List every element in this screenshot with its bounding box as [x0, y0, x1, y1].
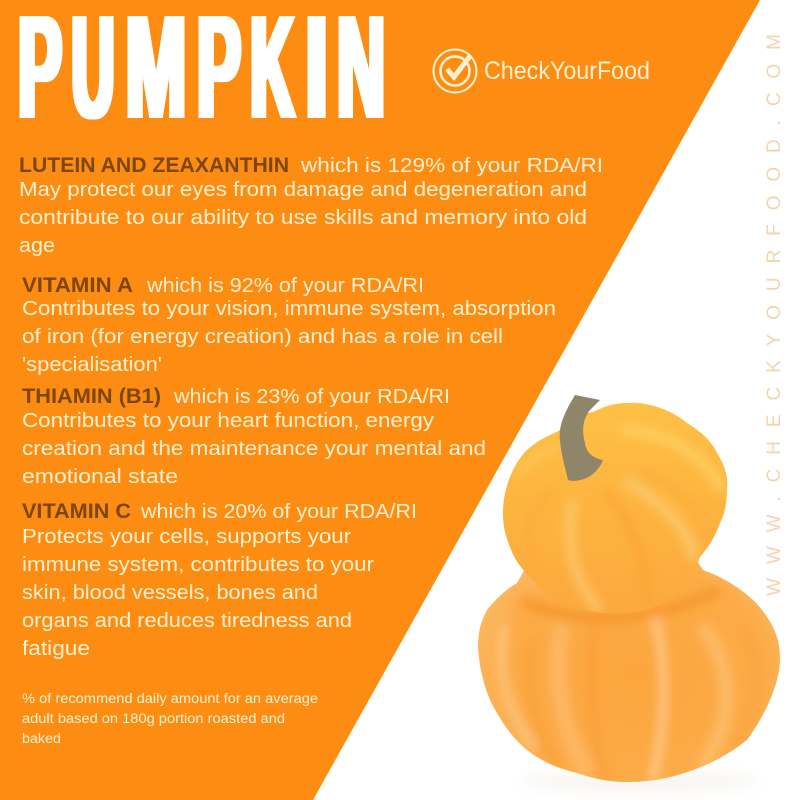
description: creation and the maintenance your mental and — [22, 438, 486, 460]
top pumpkin — [503, 403, 727, 613]
description: 'specialisation' — [22, 354, 162, 376]
footnote: % of recommend daily amount for an average — [22, 691, 318, 706]
vertical website text: WWW.CHECKYOURFOOD.COM — [764, 34, 785, 596]
percentage: which is 20% of your RDA/RI — [140, 501, 417, 523]
heading: LUTEIN AND ZEAXANTHIN — [19, 154, 289, 177]
heading: THIAMIN (B1) — [22, 385, 161, 408]
description — [22, 526, 374, 660]
description: contribute to our ability to use skills and memory into old — [19, 207, 587, 229]
description: of iron (for energy creation) and has a role in cell — [22, 326, 503, 348]
title — [18, 0, 385, 151]
footnote: adult based on 180g portion roasted and — [22, 711, 285, 726]
logo icon: check mark in circle — [434, 50, 476, 92]
percentage: which is 129% of your RDA/RI — [300, 155, 603, 177]
bottom pumpkin — [478, 540, 780, 782]
heading: VITAMIN C — [22, 500, 131, 523]
heading: VITAMIN A — [22, 274, 133, 297]
description: Protects your cells, supports your — [22, 526, 351, 548]
description: emotional state — [22, 466, 178, 488]
section: vitamin c — [22, 500, 417, 660]
ground shadow — [520, 775, 760, 789]
description — [22, 410, 486, 488]
description: Contributes to your heart function, energy — [22, 410, 434, 432]
footnote: baked — [22, 731, 61, 746]
description: organs and reduces tiredness and — [22, 610, 352, 632]
footnote — [22, 691, 318, 746]
pumpkin stem — [560, 395, 603, 481]
description: skin, blood vessels, bones and — [22, 582, 318, 604]
percentage: which is 92% of your RDA/RI — [146, 275, 424, 297]
logo wordmark: CheckYourFood — [484, 57, 650, 85]
percentage: which is 23% of your RDA/RI — [173, 386, 450, 408]
description: age — [19, 235, 55, 257]
logo: CheckYourFood — [434, 50, 650, 92]
description — [22, 298, 556, 376]
pumpkin photo illustration — [478, 395, 780, 789]
section: thiamin b1 — [22, 385, 486, 488]
description: May protect our eyes from damage and degeneration and — [19, 179, 587, 201]
section: vitamin a — [22, 274, 556, 376]
description: Contributes to your vision, immune system, absorption — [22, 298, 556, 320]
description: fatigue — [22, 638, 90, 660]
description: immune system, contributes to your — [22, 554, 374, 576]
description — [19, 179, 587, 257]
section: lutein and zeaxanthin — [19, 154, 603, 257]
